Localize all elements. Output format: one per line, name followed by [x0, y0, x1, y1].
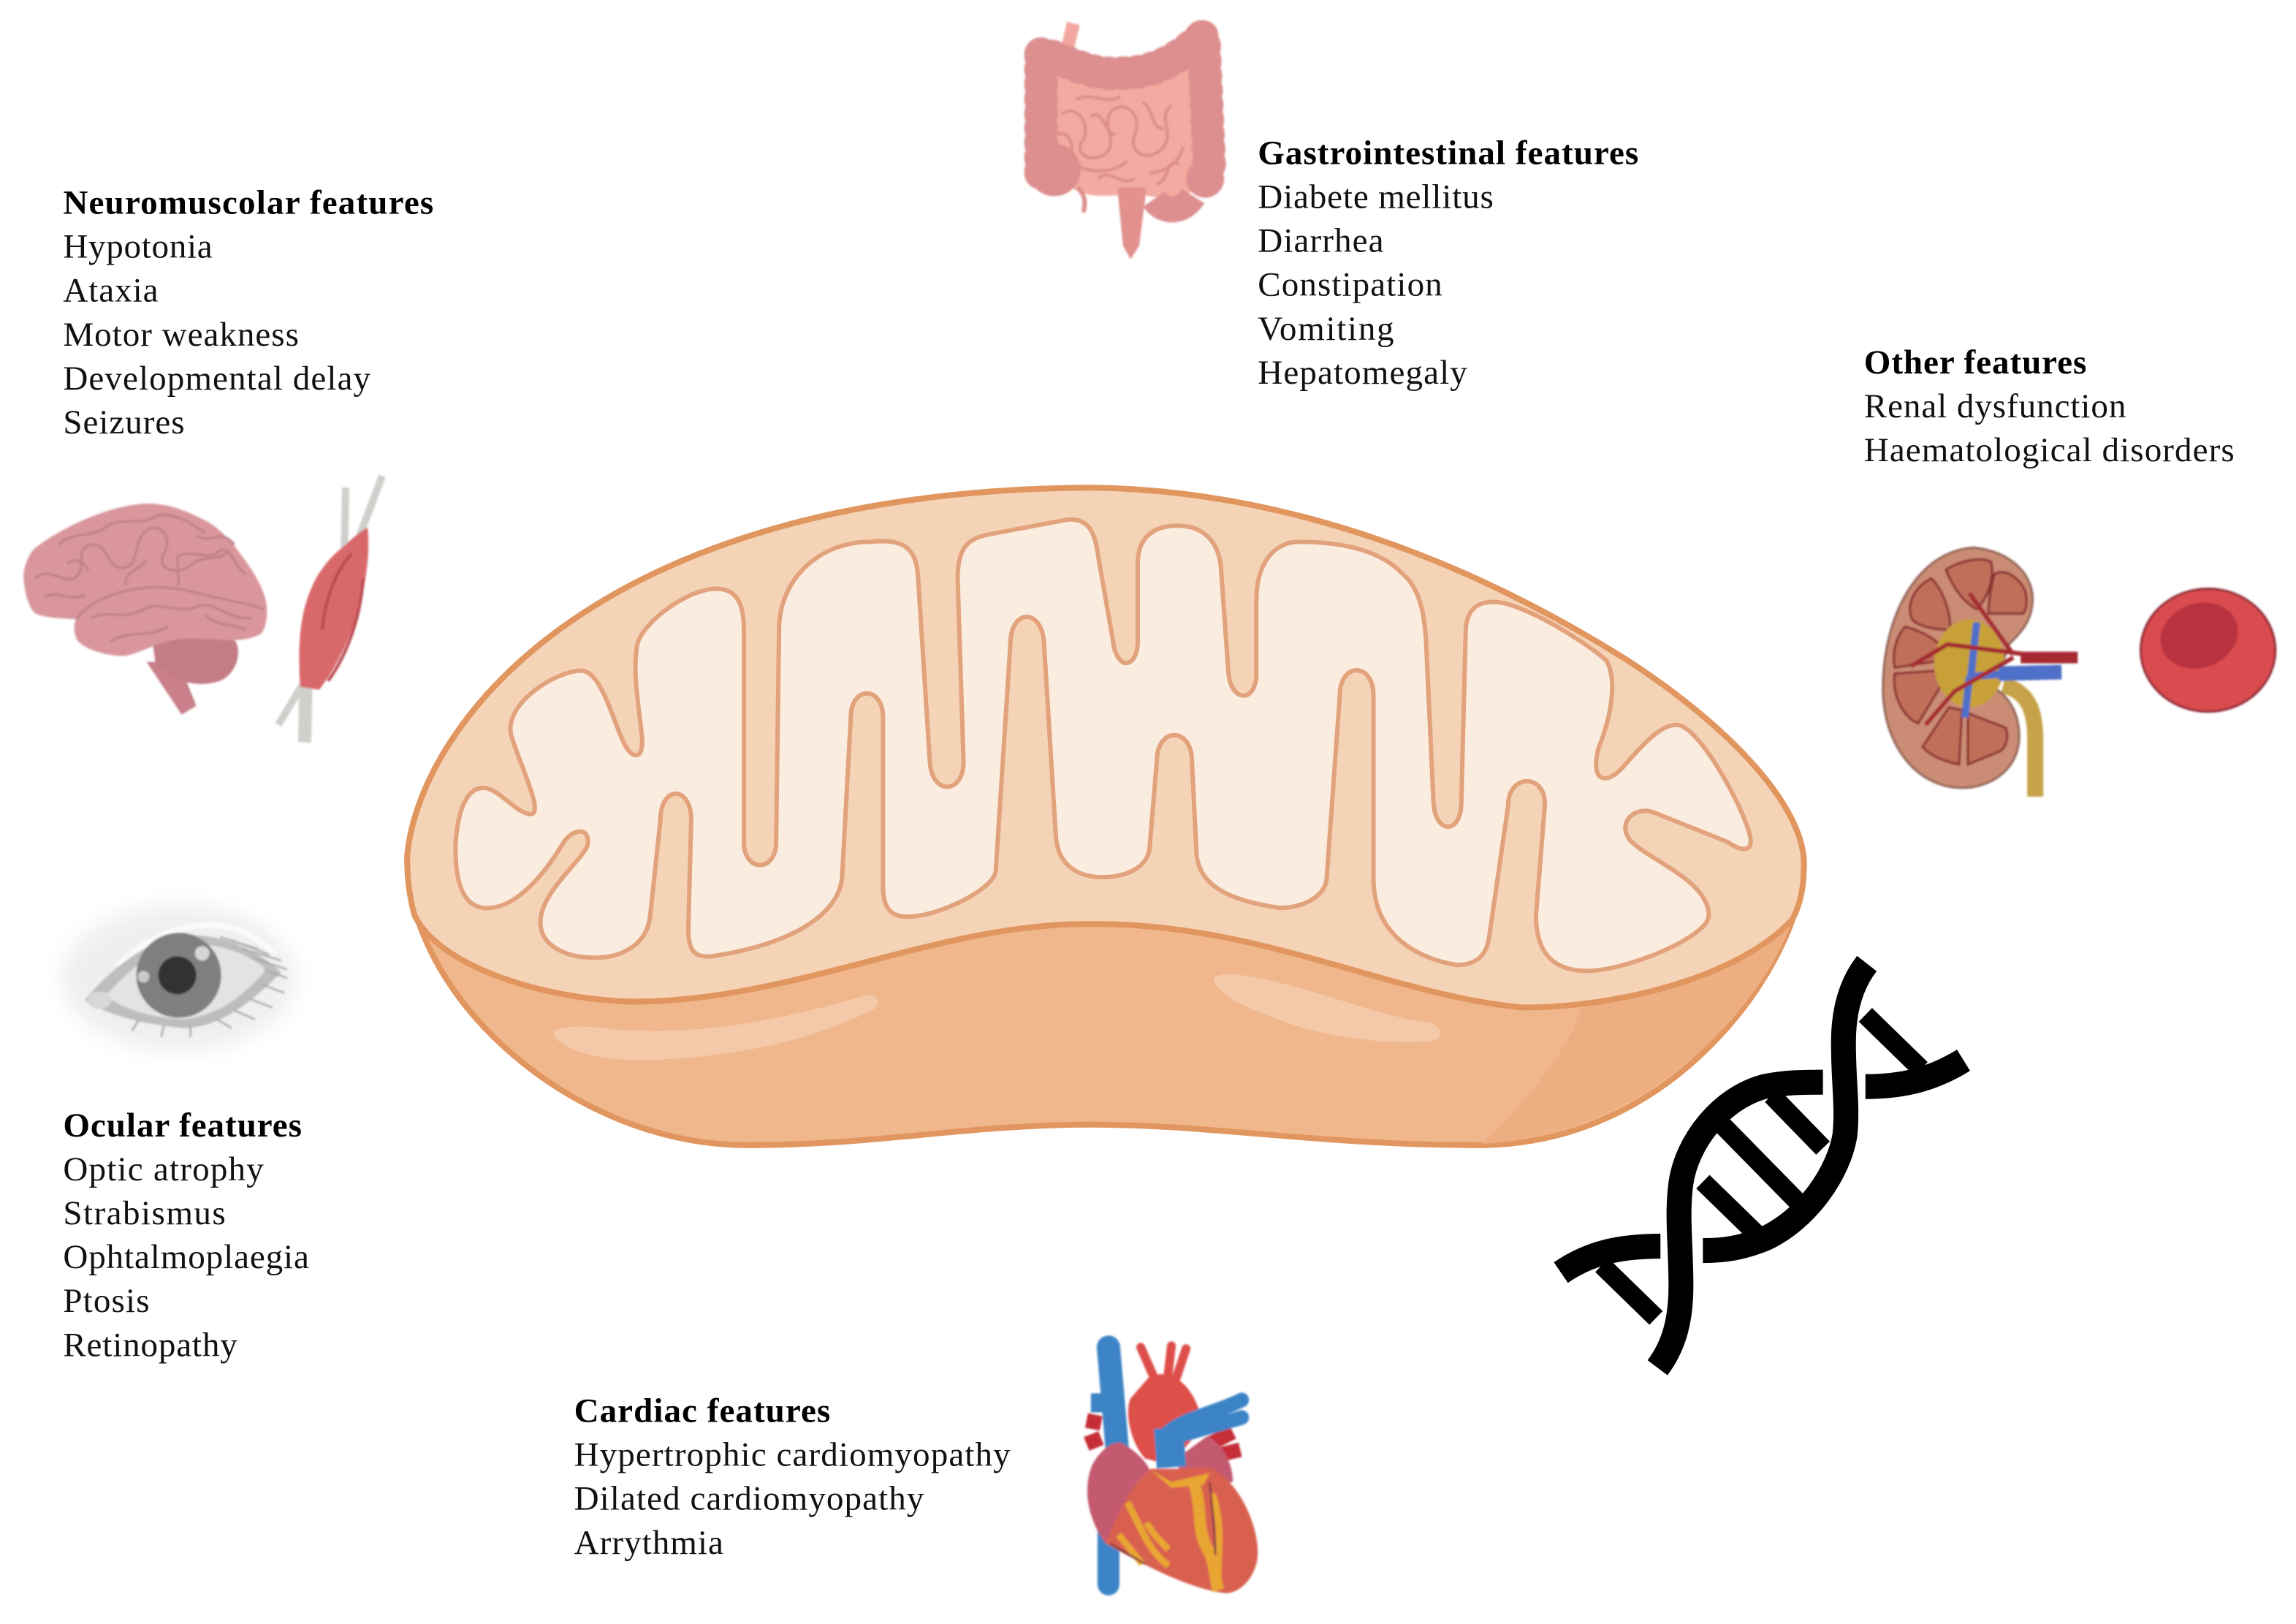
ileum stub — [1065, 23, 1073, 61]
text: neuromuscular features: Motor weakness — [63, 316, 299, 354]
icon: muscle — [278, 476, 382, 743]
cell centre — [2151, 592, 2248, 679]
top surface — [407, 487, 1804, 1007]
coronary dark lines — [1110, 1482, 1215, 1564]
text: gastrointestinal features: Hepatomegaly — [1258, 354, 1467, 392]
ureter — [2003, 686, 2035, 797]
pupil — [159, 956, 197, 994]
text: ocular features: Ocular features — [63, 1107, 302, 1145]
text: gastrointestinal features: Constipation — [1258, 266, 1442, 304]
text: ocular features: Ophtalmoplaegia — [63, 1238, 309, 1276]
text: ocular features: Ptosis — [63, 1282, 150, 1320]
left atrium — [1179, 1437, 1233, 1485]
descending lobes — [1186, 159, 1224, 197]
pulmonary trunk — [1168, 1428, 1171, 1468]
reflections — [195, 946, 210, 960]
cecum — [1028, 143, 1081, 196]
text: neuromuscular features: Neuromuscolar features — [63, 184, 433, 222]
icon: brain — [23, 504, 267, 715]
text: ocular features: Optic atrophy — [63, 1150, 264, 1188]
cerebellum — [153, 635, 238, 684]
renal vein — [1965, 623, 2009, 718]
coronary vessels — [1151, 1471, 1209, 1488]
inferior vena cava — [1103, 1530, 1114, 1585]
pulmonary vessels right — [1209, 1433, 1240, 1456]
text: other features: Other features — [1864, 344, 2086, 382]
haustra — [1041, 35, 1209, 172]
aortic branches — [1141, 1346, 1186, 1384]
colon — [1041, 35, 1209, 172]
right atrium — [1087, 1443, 1151, 1544]
renal pelvis — [1934, 620, 2004, 707]
lashes — [132, 937, 287, 1037]
icon: kidney — [1883, 547, 2078, 797]
text: other features: Renal dysfunction — [1864, 387, 2126, 425]
upper crease — [117, 925, 275, 966]
renal artery — [1911, 593, 2028, 725]
text: gastrointestinal features: Gastrointestinal features — [1258, 134, 1638, 172]
text: cardiac features: Hypertrophic cardiomyopathy — [574, 1436, 1011, 1474]
text: gastrointestinal features: Vomiting — [1258, 310, 1394, 348]
tendons — [278, 476, 382, 725]
text: gastrointestinal features: Diarrhea — [1258, 222, 1384, 260]
text: cardiac features: Cardiac features — [574, 1392, 830, 1430]
text: ocular features: Strabismus — [63, 1194, 226, 1232]
text: ocular features — [63, 1107, 309, 1364]
text: other features: Haematological disorders — [1864, 431, 2235, 469]
text: other features — [1864, 344, 2235, 469]
icon: DNA helix — [1561, 963, 1964, 1367]
text: neuromuscular features: Ataxia — [63, 272, 159, 310]
ventricles — [1106, 1468, 1258, 1593]
text: cardiac features: Dilated cardiomyopathy — [574, 1480, 924, 1518]
outer body — [407, 487, 1804, 1145]
kidney body — [1883, 547, 2032, 788]
rectum — [1117, 187, 1147, 259]
appendix — [1078, 187, 1084, 213]
text: cardiac features: Arrythmia — [574, 1524, 723, 1562]
renal lobes — [1894, 559, 2026, 764]
highlights — [554, 995, 878, 1060]
icon: intestines — [1028, 23, 1224, 259]
muscle belly — [299, 527, 368, 690]
eyelids — [85, 936, 281, 1028]
inner corner — [88, 991, 111, 1009]
muscle groove — [322, 553, 363, 681]
sulci — [35, 515, 264, 671]
mitochondrion — [407, 487, 1804, 1145]
sigmoid colon — [1154, 196, 1193, 209]
superior vena cava — [1109, 1347, 1117, 1450]
icon: heart — [1087, 1346, 1258, 1593]
text: neuromuscular features: Seizures — [63, 403, 185, 441]
icon: eye — [61, 905, 296, 1052]
shaded side — [1482, 911, 1795, 1144]
text: cardiac features — [574, 1392, 1011, 1562]
text: gastrointestinal features — [1258, 134, 1638, 392]
pulmonary vessels left — [1087, 1420, 1101, 1444]
text: neuromuscular features: Hypotonia — [63, 228, 213, 266]
brainstem — [147, 662, 197, 715]
text: ocular features: Retinopathy — [63, 1326, 237, 1364]
bowel loops — [1057, 96, 1183, 184]
small intestine — [1043, 44, 1204, 197]
inner membrane cristae — [455, 520, 1751, 971]
cerebrum — [23, 504, 267, 656]
text: neuromuscular features: Developmental delay — [63, 360, 371, 398]
icon: red blood cell — [2140, 588, 2276, 712]
text: neuromuscular features — [63, 184, 433, 441]
soft halo — [61, 905, 296, 1052]
iris — [137, 933, 221, 1018]
aorta — [1128, 1374, 1202, 1462]
sclera — [105, 944, 267, 1020]
text: gastrointestinal features: Diabete mellitus — [1258, 178, 1494, 216]
